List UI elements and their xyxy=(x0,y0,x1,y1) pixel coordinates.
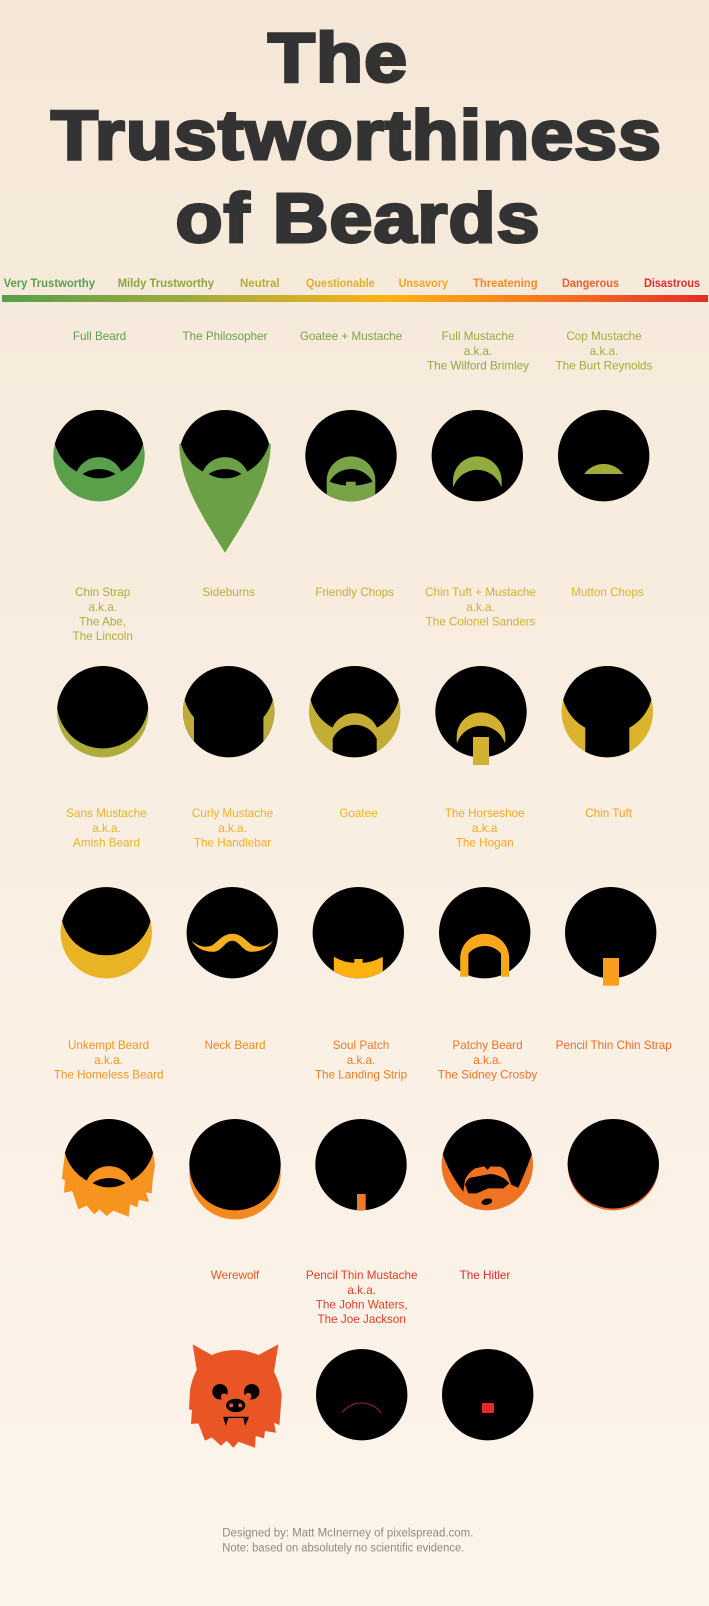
legend: trust scale: Very Trustworthy xyxy=(4,276,95,290)
credits xyxy=(222,1528,473,1555)
panel: The Philosopher xyxy=(179,330,271,553)
legend: trust scale: Neutral xyxy=(240,276,280,290)
panel: Full Beard xyxy=(53,330,145,501)
panel: Soul Patch xyxy=(315,1039,408,1210)
panel: Sans Mustache xyxy=(61,807,152,978)
icon: curly mustache xyxy=(187,887,278,978)
icon: goatee and mustache xyxy=(305,410,397,501)
legend: trust scale: Questionable xyxy=(306,276,375,290)
panel: Goatee + Mustache xyxy=(300,330,402,501)
panel: Full Mustache xyxy=(427,330,529,501)
panel: Cop Mustache xyxy=(556,330,653,501)
panel: Sans Mustache: Sans Mustache xyxy=(66,807,147,820)
panel: Goatee xyxy=(313,807,404,978)
panel: Unkempt Beard: a.k.a. xyxy=(94,1054,123,1067)
panel: Friendly Chops: Friendly Chops xyxy=(315,586,394,599)
panel: Mutton Chops xyxy=(562,586,653,757)
icon: full mustache xyxy=(432,410,523,501)
panel: Neck Beard: Neck Beard xyxy=(204,1039,266,1052)
panel: Curly Mustache: The Handlebar xyxy=(194,836,271,850)
panel: Unkempt Beard: Unkempt Beard xyxy=(68,1039,149,1052)
panel: Sideburns: Sideburns xyxy=(202,586,255,599)
panel: Mutton Chops: Mutton Chops xyxy=(571,586,644,599)
panel: Pencil Thin Mustache: The Joe Jackson xyxy=(318,1313,406,1326)
panel: Chin Tuft xyxy=(565,807,656,986)
panel: Full Mustache: Full Mustache xyxy=(442,330,514,343)
panel: Goatee: Goatee xyxy=(339,807,378,820)
title: of Beards xyxy=(175,178,541,257)
panel: Pencil Thin Chin Strap xyxy=(556,1039,672,1210)
panel: Sans Mustache: a.k.a. xyxy=(92,822,121,835)
panel: Chin Tuft: Chin Tuft xyxy=(585,807,633,820)
title xyxy=(51,18,662,257)
panel: The Hitler xyxy=(442,1269,533,1440)
legend: trust scale: Threatening xyxy=(473,276,538,290)
panel: Cop Mustache: The Burt Reynolds xyxy=(556,360,653,372)
panel: Cop Mustache: a.k.a. xyxy=(590,345,618,358)
panel: The Horseshoe xyxy=(439,807,530,978)
credits: Note: based on absolutely no scientific evidence. xyxy=(222,1543,464,1555)
gradient scale bar xyxy=(2,295,708,302)
panel: Chin Strap xyxy=(57,586,148,757)
credits: Designed by: Matt McInerney of pixelspread.com. xyxy=(222,1528,473,1540)
panel: Soul Patch: The Landing Strip xyxy=(315,1068,408,1082)
panel: The Horseshoe: a.k.a xyxy=(472,822,498,835)
panel: Pencil Thin Chin Strap: Pencil Thin Chin Strap xyxy=(556,1039,672,1052)
panel: Neck Beard xyxy=(189,1039,281,1219)
legend: trust scale xyxy=(4,276,700,290)
panel: Full Beard: Full Beard xyxy=(73,330,126,343)
panel: Chin Strap: The Abe, xyxy=(79,616,126,628)
legend: trust scale: Mildy Trustworthy xyxy=(118,276,214,290)
panel: Pencil Thin Mustache: The John Waters, xyxy=(316,1298,408,1312)
icon: chin tuft and mustache xyxy=(435,666,527,765)
icon: sideburns xyxy=(183,666,274,757)
panel: Curly Mustache: Curly Mustache xyxy=(192,807,273,820)
panel: The Horseshoe: The Hogan xyxy=(456,836,514,850)
icon: horseshoe mustache xyxy=(439,887,530,978)
panel: Pencil Thin Mustache xyxy=(306,1269,417,1440)
icon: werewolf xyxy=(189,1344,282,1448)
legend: trust scale: Unsavory xyxy=(399,276,448,290)
panel: The Philosopher: The Philosopher xyxy=(182,330,268,343)
legend: trust scale: Dangerous xyxy=(562,276,619,290)
panel: Goatee + Mustache: Goatee + Mustache xyxy=(300,330,402,343)
panel: Full Mustache: The Wilford Brimley xyxy=(427,360,529,372)
icon: patchy beard xyxy=(442,1119,533,1210)
panel: Patchy Beard xyxy=(438,1039,537,1210)
panel: Curly Mustache xyxy=(187,807,278,978)
panel: Patchy Beard: a.k.a. xyxy=(473,1054,502,1067)
panel: Pencil Thin Mustache: Pencil Thin Mustache xyxy=(306,1269,417,1282)
icon: sans mustache xyxy=(61,887,152,978)
panel: Patchy Beard: Patchy Beard xyxy=(452,1039,523,1052)
icon: soul patch xyxy=(315,1119,407,1210)
panel: Curly Mustache: a.k.a. xyxy=(218,822,247,835)
legend: trust scale: Disastrous xyxy=(644,276,700,290)
icon: philosopher beard xyxy=(179,410,271,553)
title: The xyxy=(268,18,408,97)
icon: friendly chops xyxy=(309,666,400,757)
panel: Patchy Beard: The Sidney Crosby xyxy=(438,1068,537,1082)
icon: the hitler xyxy=(442,1349,533,1440)
panel: The Hitler: The Hitler xyxy=(460,1269,510,1282)
panel: Friendly Chops xyxy=(309,586,400,757)
panel: Chin Tuft + Mustache: a.k.a. xyxy=(466,601,495,614)
panel: Sideburns xyxy=(183,586,274,757)
icon: mutton chops xyxy=(562,666,653,757)
panel: Full Mustache: a.k.a. xyxy=(464,345,492,358)
icon: chin tuft xyxy=(565,887,656,986)
panel: Soul Patch: a.k.a. xyxy=(347,1054,375,1067)
panel: Chin Tuft + Mustache: The Colonel Sanders xyxy=(426,616,536,628)
icon: pencil thin mustache xyxy=(316,1349,407,1440)
icon: goatee xyxy=(313,887,404,978)
title: Trustworthiness xyxy=(51,95,662,174)
panel: Chin Tuft + Mustache xyxy=(425,586,536,765)
icon: neck beard xyxy=(189,1119,281,1219)
panel: Werewolf xyxy=(189,1269,282,1448)
panel: Unkempt Beard xyxy=(54,1039,163,1217)
icon: full beard xyxy=(53,410,145,501)
panel: Unkempt Beard: The Homeless Beard xyxy=(54,1068,163,1082)
panel: Werewolf: Werewolf xyxy=(211,1269,260,1282)
panel: Cop Mustache: Cop Mustache xyxy=(566,330,642,343)
panel: Chin Strap: Chin Strap xyxy=(75,586,131,599)
panel: Chin Tuft + Mustache: Chin Tuft + Mustache xyxy=(425,586,536,599)
panel: Sans Mustache: Amish Beard xyxy=(73,836,140,850)
icon: pencil thin chin strap xyxy=(568,1119,659,1210)
panel: Pencil Thin Mustache: a.k.a. xyxy=(347,1284,376,1297)
panel: Soul Patch: Soul Patch xyxy=(333,1039,389,1052)
panel: Chin Strap: a.k.a. xyxy=(88,601,117,614)
panel: Chin Strap: The Lincoln xyxy=(72,630,133,643)
icon: chin strap xyxy=(57,666,148,757)
icon: cop mustache xyxy=(558,410,649,501)
icon: unkempt beard xyxy=(62,1119,155,1217)
panel: The Horseshoe: The Horseshoe xyxy=(445,807,525,820)
